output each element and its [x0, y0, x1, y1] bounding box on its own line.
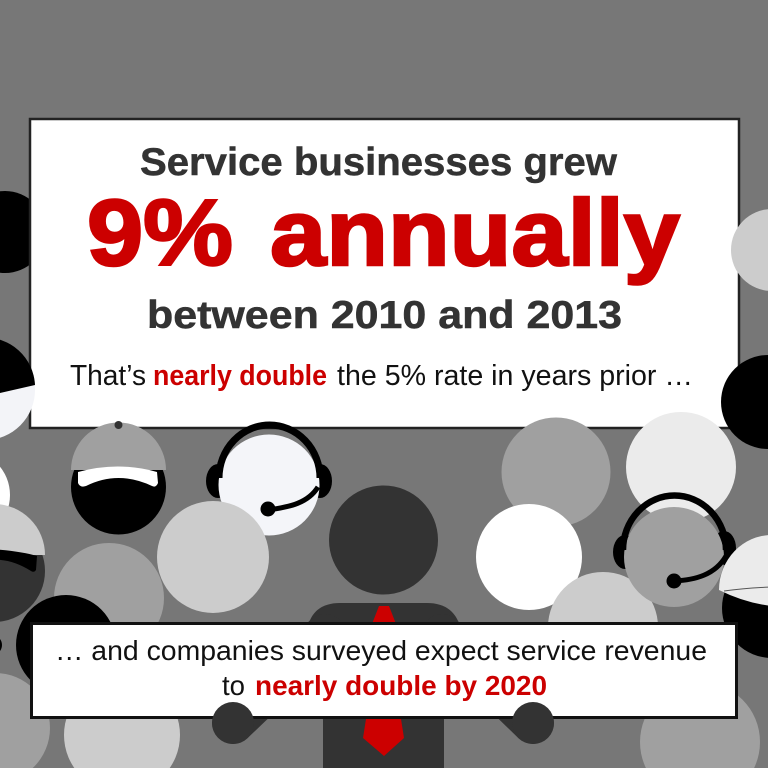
text: nearly double comparison: the 5% rate in years prior …: [337, 360, 693, 392]
figure: central person with red tie: [233, 486, 533, 768]
body: [307, 603, 461, 768]
figure: left edge person with cap: [0, 504, 45, 622]
figure: gray circle: [502, 418, 610, 526]
text: nearly double comparison: [70, 360, 693, 392]
text: nearly double by 2020: nearly double by 2020: [255, 670, 547, 701]
text: nearly double comparison: That’s: [70, 360, 146, 392]
figure: gray circle lower left: [54, 543, 164, 653]
figure: person with gray cap: [71, 421, 166, 534]
headline: 9% annually: [87, 180, 680, 285]
figure: black circle right edge: [721, 355, 768, 449]
figure: left hand: [212, 702, 254, 744]
icon: headset: [219, 425, 320, 516]
figure: person with headset: [206, 425, 332, 536]
panel: revenue expectation: [32, 624, 736, 718]
figure: white circle right: [476, 504, 582, 610]
head: [329, 486, 438, 594]
tie knot: [372, 606, 396, 624]
left arm: [233, 635, 325, 723]
headline: 9% annually: annually: [270, 180, 680, 285]
figure: black circle lower left: [16, 595, 116, 695]
figure: tie lower part: [363, 719, 404, 756]
headline: 9% annually: 9%: [87, 180, 233, 285]
subheading: date range: between 2010 and 2013: [147, 294, 622, 337]
icon: headset: [623, 495, 726, 588]
figure: small black circle at edge: [0, 635, 2, 655]
figure: light circle: [157, 501, 269, 613]
figure: black circle behind top panel: [0, 191, 46, 273]
figure: light circle right: [548, 572, 658, 682]
text: nearly double by 2020: to: [222, 670, 245, 701]
figure: person with headset right: [613, 495, 736, 607]
figure: light gray circle on right edge: [731, 209, 768, 291]
text: companies surveyed: … and companies surveyed expect service revenue: [55, 635, 707, 666]
figure: white circle far left: [0, 450, 10, 540]
figure: gray circle bottom left: [0, 673, 50, 768]
text: nearly double comparison: nearly double: [153, 360, 327, 392]
right arm: [442, 635, 533, 723]
figure: capped person right edge: [719, 535, 768, 658]
figure: right hand: [512, 702, 554, 744]
heading: service businesses grew: Service businesses grew: [140, 141, 618, 184]
figure: left edge capped person: [0, 337, 35, 440]
figure: pale circle: [626, 412, 736, 522]
figure: light circle bottom left: [64, 677, 180, 768]
figure: gray circle bottom right: [640, 682, 760, 768]
panel: main statistic: [30, 119, 739, 428]
